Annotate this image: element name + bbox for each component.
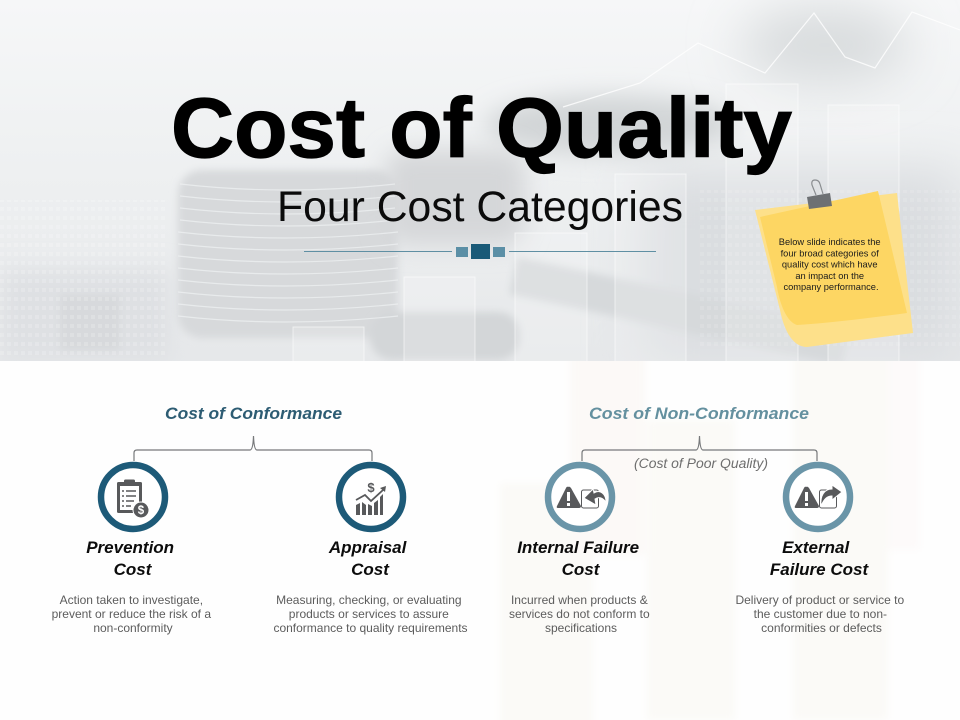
description: internal failure cost: Incurred when products & bbox=[511, 593, 648, 607]
note text: company performance. bbox=[783, 282, 879, 292]
translucent chart bars bbox=[293, 84, 899, 367]
label: internal failure cost: Internal Failure bbox=[517, 538, 639, 557]
icon: external failure cost bbox=[786, 465, 850, 529]
description: external failure cost: the customer due to non- bbox=[754, 607, 887, 621]
coin stacks bbox=[60, 150, 850, 365]
label: internal failure cost: Cost bbox=[562, 560, 601, 579]
label: prevention cost: Cost bbox=[114, 560, 153, 579]
label: external failure cost: External bbox=[782, 538, 850, 557]
description: appraisal cost: conformance to quality requirements bbox=[273, 621, 468, 635]
note paper bbox=[755, 193, 913, 347]
description: prevention cost: non-conformity bbox=[93, 621, 173, 635]
icon: internal failure cost bbox=[548, 465, 612, 529]
heading: cost of non-conformance: Cost of Non-Conformance bbox=[589, 404, 809, 423]
icon: appraisal cost: $ bbox=[367, 480, 375, 495]
note text: four broad categories of bbox=[781, 248, 879, 258]
subtitle: Four Cost Categories bbox=[277, 183, 683, 231]
note: cost of poor quality: (Cost of Poor Quality) bbox=[634, 456, 768, 471]
note text: an impact on the bbox=[795, 271, 864, 281]
icon: prevention cost: $ bbox=[138, 505, 145, 517]
description: prevention cost: prevent or reduce the risk of a bbox=[52, 607, 211, 621]
description: internal failure cost: specifications bbox=[545, 621, 617, 635]
label: external failure cost: Failure Cost bbox=[770, 560, 869, 579]
chart line bbox=[563, 12, 960, 107]
icon: prevention cost bbox=[101, 465, 165, 529]
label: appraisal cost: Appraisal bbox=[328, 538, 408, 557]
icon: appraisal cost bbox=[339, 465, 403, 529]
divider ornament bbox=[304, 244, 656, 259]
description: external failure cost: Delivery of product or service to bbox=[735, 593, 905, 607]
note text: quality cost which have bbox=[782, 260, 878, 270]
description: internal failure cost: services do not conform to bbox=[509, 607, 650, 621]
description: prevention cost: Action taken to investigate, bbox=[60, 593, 203, 607]
lower panel background bbox=[0, 340, 960, 720]
icon: binder clip bbox=[807, 180, 832, 209]
label: prevention cost: Prevention bbox=[86, 538, 174, 557]
coin stack ridges bbox=[178, 184, 398, 322]
description: appraisal cost: Measuring, checking, or evaluating bbox=[276, 593, 462, 607]
photo banner background bbox=[0, 0, 960, 367]
description: external failure cost: conformities or defects bbox=[761, 621, 882, 635]
bracket: non-conformance bbox=[582, 436, 817, 461]
note text: Below slide indicates the bbox=[779, 237, 881, 247]
title: Cost of Quality bbox=[171, 81, 792, 175]
heading: cost of conformance: Cost of Conformance bbox=[165, 404, 342, 423]
city windows bbox=[0, 200, 165, 355]
description: appraisal cost: products or services to assure bbox=[289, 607, 449, 621]
label: appraisal cost: Cost bbox=[351, 560, 390, 579]
sticky note bbox=[755, 180, 913, 347]
bracket: conformance bbox=[134, 436, 372, 461]
